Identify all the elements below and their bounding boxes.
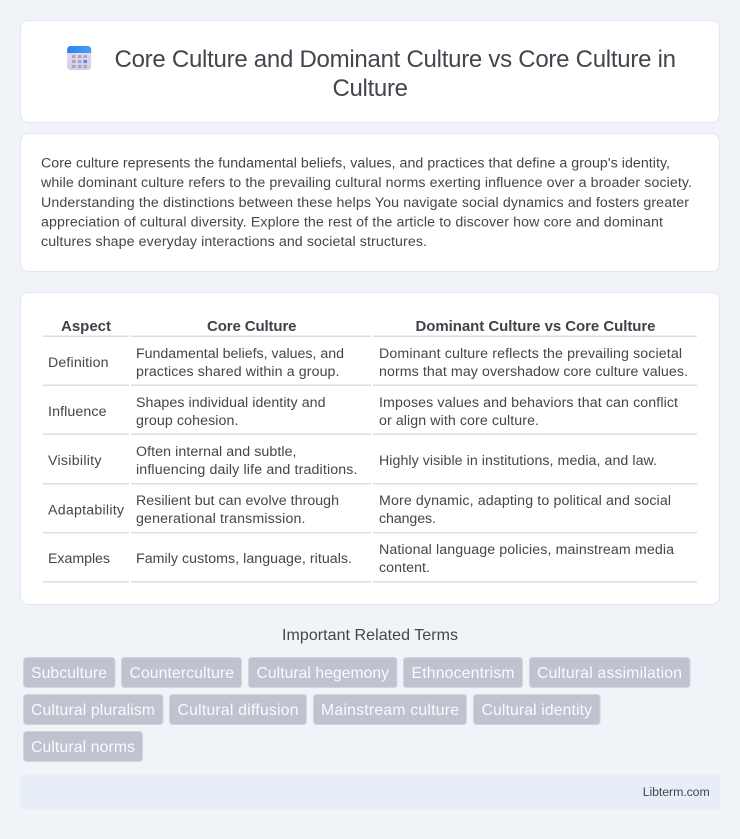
heading: related terms: Important Related Terms bbox=[282, 627, 458, 644]
table header: Aspect bbox=[61, 318, 111, 335]
table row: examples: content. bbox=[379, 560, 430, 576]
table row: visibility: Often internal and subtle, bbox=[136, 444, 296, 460]
text block: introduction: Understanding the distinctions between these helps You navigate social dynamics and fosters greater bbox=[41, 195, 689, 211]
table row: influence: group cohesion. bbox=[136, 413, 238, 429]
related term tags bbox=[24, 658, 690, 762]
title: Core Culture and Dominant Culture vs Core Culture in bbox=[114, 46, 676, 73]
panel: introduction bbox=[20, 134, 720, 272]
table row: adaptability: Resilient but can evolve through bbox=[136, 493, 339, 509]
text block: introduction: Core culture represents the fundamental beliefs, values, and practices that define a group's identity, bbox=[41, 156, 670, 172]
footer band bbox=[20, 775, 720, 809]
title: Culture bbox=[332, 75, 408, 102]
text block: introduction: appreciation of cultural diversity. Explore the rest of the article to discover how core and dominant bbox=[41, 214, 663, 230]
panel: title header bbox=[20, 20, 720, 122]
related term tags: Cultural hegemony bbox=[256, 665, 389, 682]
table row: influence: or align with core culture. bbox=[379, 413, 539, 429]
table row: examples: Examples bbox=[48, 551, 110, 567]
table row: definition: Dominant culture reflects the prevailing societal bbox=[379, 346, 682, 362]
table row: visibility bbox=[48, 444, 657, 478]
table row: definition: practices shared within a group. bbox=[136, 364, 340, 380]
panel: comparison table bbox=[20, 292, 720, 604]
related term tags: Cultural pluralism bbox=[31, 702, 155, 719]
table row: adaptability: Adaptability bbox=[48, 502, 125, 518]
icon: calendar bbox=[67, 46, 91, 70]
table row: adaptability: More dynamic, adapting to political and social bbox=[379, 493, 671, 509]
table row: definition: Fundamental beliefs, values, and bbox=[136, 346, 344, 362]
related term tags: Ethnocentrism bbox=[412, 665, 514, 682]
table row: visibility: Highly visible in institutions, media, and law. bbox=[379, 453, 657, 469]
related term tags: Cultural diffusion bbox=[178, 702, 298, 719]
related term tags: Mainstream culture bbox=[321, 702, 459, 719]
text block: introduction bbox=[40, 156, 692, 250]
table row: definition: norms that may overshadow core culture values. bbox=[379, 364, 688, 380]
table row: influence: Influence bbox=[48, 404, 107, 420]
table row: visibility: Visibility bbox=[48, 453, 102, 469]
related term tags: Cultural norms bbox=[31, 739, 135, 756]
related term tags: Counterculture bbox=[130, 665, 234, 682]
table row: adaptability bbox=[48, 493, 671, 527]
table header bbox=[61, 318, 656, 335]
related term tags: Cultural assimilation bbox=[537, 665, 682, 682]
related term tags: Subculture bbox=[31, 665, 107, 682]
table row: examples: Family customs, language, rituals. bbox=[136, 551, 352, 567]
table row: influence bbox=[48, 395, 678, 429]
footer credit: Libterm.com bbox=[643, 785, 710, 799]
table header: Core Culture bbox=[207, 318, 296, 335]
table row: influence: Shapes individual identity and bbox=[136, 395, 326, 411]
title bbox=[114, 46, 676, 102]
table row: examples bbox=[48, 542, 674, 576]
table row: definition: Definition bbox=[48, 355, 108, 371]
table row: visibility: influencing daily life and traditions. bbox=[136, 462, 358, 478]
table row: influence: Imposes values and behaviors that can conflict bbox=[379, 395, 678, 411]
table row: examples: National language policies, mainstream media bbox=[379, 542, 674, 558]
text block: introduction: cultures shape everyday interactions and societal structures. bbox=[41, 234, 427, 250]
table row: definition bbox=[48, 346, 688, 380]
table header: Dominant Culture vs Core Culture bbox=[416, 318, 656, 335]
table row: adaptability: changes. bbox=[379, 511, 436, 527]
text block: introduction: while dominant culture refers to the prevailing cultural norms exerting influence over a broader society. bbox=[40, 175, 692, 191]
table row: adaptability: generational transmission. bbox=[136, 511, 306, 527]
related term tags: Cultural identity bbox=[482, 702, 592, 719]
